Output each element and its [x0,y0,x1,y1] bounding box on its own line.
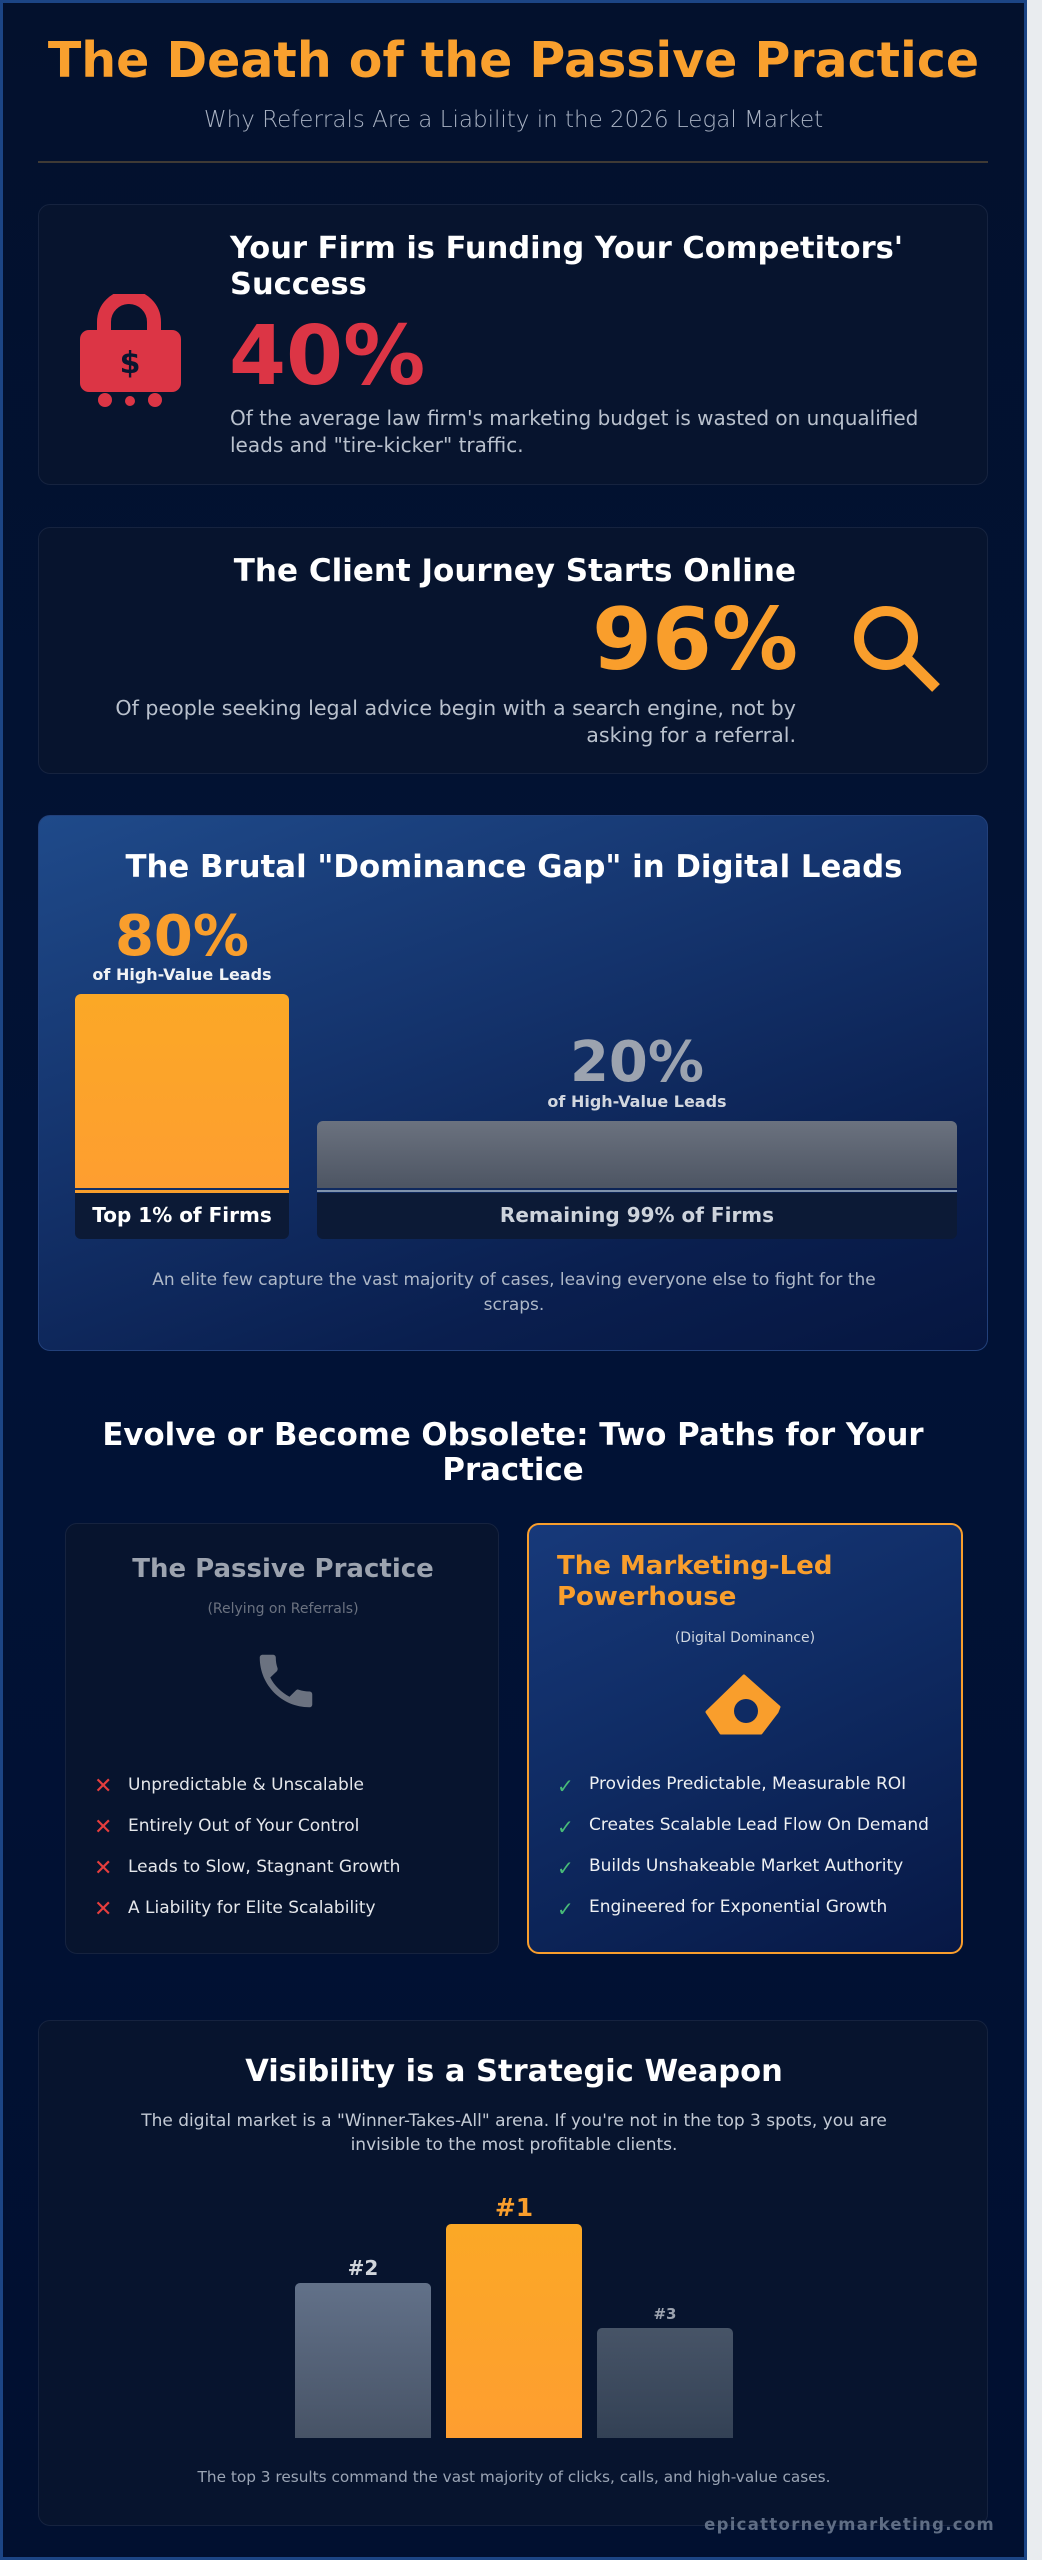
description: Of people seeking legal advice begin with a search engine, not by asking for a referral. [115,696,796,747]
bar: remaining 99% [317,1030,957,1239]
icon: money lock: $ [120,346,140,381]
bar: remaining 99%: 20% [570,1030,704,1095]
list: benefits: Engineered for Exponential Growth [589,1897,887,1917]
bar: remaining 99%: of High-Value Leads [547,1092,727,1111]
bar chart: rankings [295,2193,733,2438]
caption: The top 3 results command the vast majority of clicks, calls, and high-value cases. [198,2468,830,2486]
panel: dominance gap [38,815,988,1351]
caption: An elite few capture the vast majority of cases, leaving everyone else to fight for the scraps. [152,1270,876,1315]
heading: The Client Journey Starts Online [234,553,796,589]
list: benefits: Creates Scalable Lead Flow On Demand [589,1815,929,1835]
footer: website: epicattorneymarketing.com [704,2515,995,2534]
title: The Death of the Passive Practice [48,32,979,89]
list: drawbacks: Leads to Slow, Stagnant Growth [128,1857,400,1877]
list: drawbacks: Entirely Out of Your Control [128,1816,359,1836]
icon: search [854,606,940,692]
list: benefits: Provides Predictable, Measurable ROI [589,1774,906,1794]
panel: marketing-led powerhouse [527,1523,963,1954]
bar chart: rankings: #1 [495,2193,533,2222]
bar: top 1%: of High-Value Leads [92,965,272,984]
panel: wasted budget [38,204,988,485]
list: benefits: Builds Unshakeable Market Authority [589,1856,903,1876]
bar: top 1% [75,904,289,1239]
stat: 96%: 96% [592,590,798,690]
list: drawbacks: ✕ [94,1815,112,1840]
bar chart: rankings: #3 [653,2305,676,2323]
list: drawbacks: Unpredictable & Unscalable [128,1775,364,1795]
description: Of the average law firm's marketing budget is wasted on unqualified leads and "tire-kicker" traffic. [230,406,918,457]
subheading: (Digital Dominance) [675,1630,815,1646]
panel: visibility [38,2020,988,2526]
heading: two paths: Evolve or Become Obsolete: Two Paths for Your Practice [102,1417,924,1488]
heading: The Passive Practice [132,1554,434,1584]
stat: 40%: 40% [229,309,425,404]
panel: client journey [38,527,988,774]
bar: remaining 99%: Remaining 99% of Firms [500,1203,774,1227]
description: The digital market is a "Winner-Takes-All" arena. If you're not in the top 3 spots, you are invisible to the most profitable clients. [141,2111,887,2155]
subtitle: Why Referrals Are a Liability in the 2026 Legal Market [204,107,823,133]
list: drawbacks: ✕ [94,1774,112,1799]
icon: money lock [80,294,181,407]
icon: phone [260,1654,312,1708]
list: benefits: ✓ [557,1774,574,1798]
heading: Visibility is a Strategic Weapon [245,2054,783,2089]
panel: passive practice [65,1523,499,1954]
bar: top 1%: Top 1% of Firms [92,1203,272,1227]
icon: target tag [706,1674,780,1734]
list: drawbacks [94,1774,400,1922]
list: benefits: ✓ [557,1856,574,1880]
list: benefits [557,1774,929,1921]
heading: Your Firm is Funding Your Competitors' Success [230,231,903,302]
list: benefits: ✓ [557,1815,574,1839]
list: drawbacks: A Liability for Elite Scalability [128,1898,376,1918]
list: drawbacks: ✕ [94,1856,112,1881]
subheading: (Relying on Referrals) [207,1601,359,1617]
bar: top 1%: 80% [115,904,249,969]
heading: The Marketing-Led Powerhouse [557,1551,832,1612]
list: benefits: ✓ [557,1897,574,1921]
list: drawbacks: ✕ [94,1897,112,1922]
heading: The Brutal "Dominance Gap" in Digital Leads [125,849,903,885]
bar chart: rankings: #2 [348,2256,378,2280]
